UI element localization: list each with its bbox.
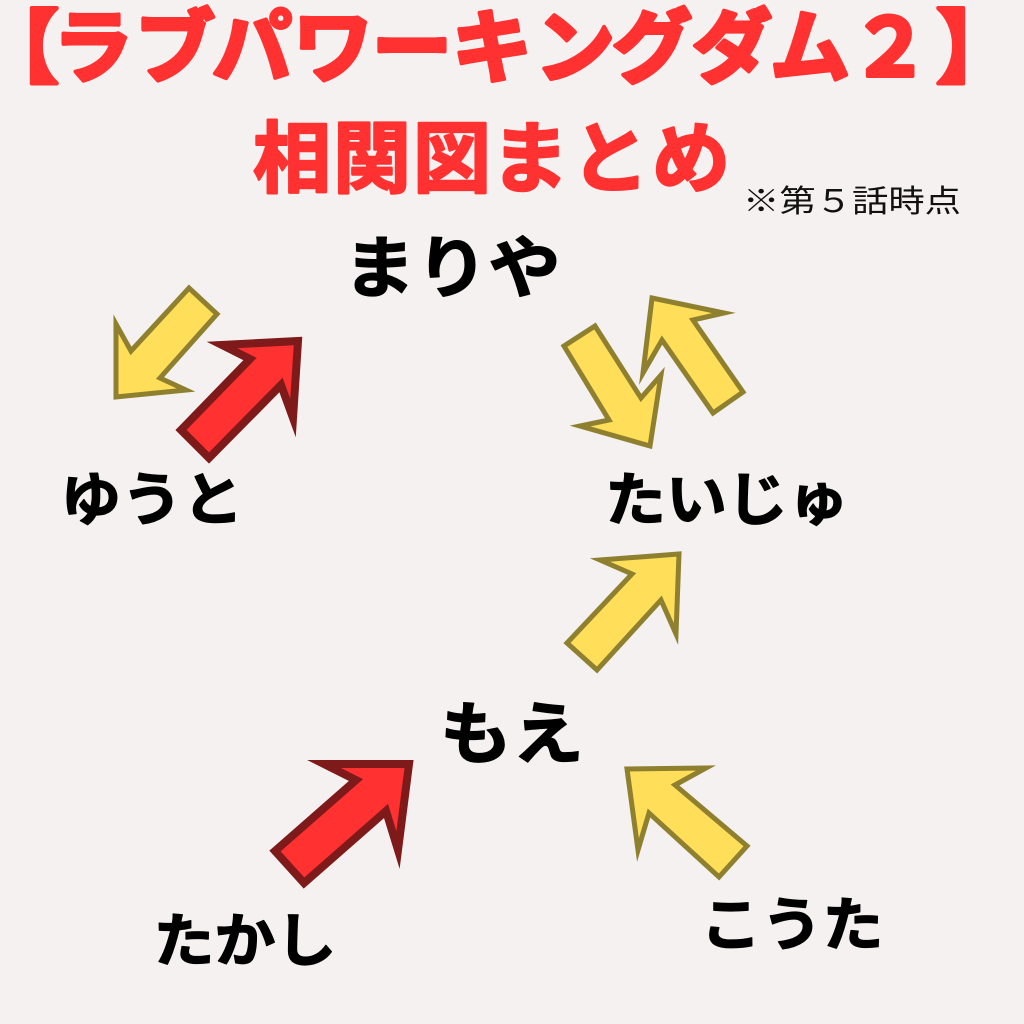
name: まりや: まりや (343, 231, 561, 306)
note: as of episode 5: ※第５話時点 (743, 184, 961, 219)
title line 1: 【 (17, 4, 57, 93)
arrow: こうた to もえ (yellow) (627, 768, 747, 877)
arrow: たかし to もえ (red) (275, 764, 409, 883)
name: ゆうと: ゆうと (61, 467, 243, 533)
title line 1: 】 (938, 4, 978, 93)
arrow: ゆうと to まりや (red) (181, 341, 298, 458)
name: たいじゅ: たいじゅ (605, 467, 849, 533)
name: こうた: こうた (701, 892, 883, 958)
name: たかし: たかし (154, 908, 336, 974)
name: もえ: もえ (440, 696, 584, 773)
arrow: たいじゅ to まりや (yellow) (643, 298, 743, 413)
title line 2: 相関図まとめ (253, 115, 730, 203)
arrow: もえ to たいじゅ (yellow) (567, 554, 679, 670)
arrow: まりや to たいじゅ (yellow) (564, 326, 661, 446)
title line 1: ラブパワーキングダム２ (53, 4, 930, 93)
arrow: まりや to ゆうと (yellow) (116, 288, 217, 397)
